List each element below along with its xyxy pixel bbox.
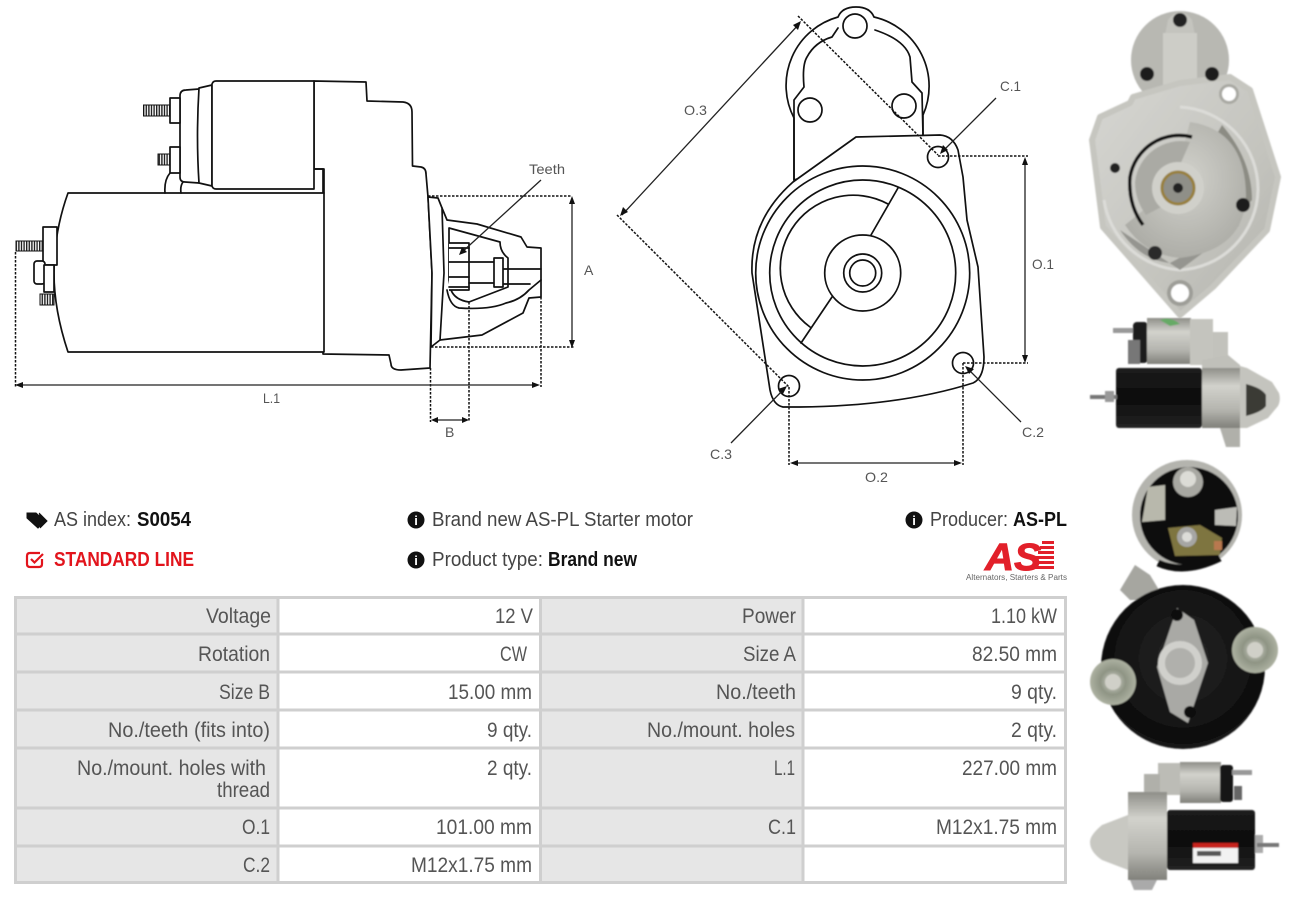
starter housing outline: [314, 81, 432, 370]
row: O.1 and C.1: M12x1.75 mm: [936, 816, 1057, 839]
row: size B and teeth: [219, 681, 1057, 704]
label: A: A: [584, 262, 594, 278]
concentric rings and hub: [756, 166, 970, 380]
row: mount holes with thread and L.1: thread: [217, 779, 270, 802]
row: O.1 and C.1: 101.00 mm: [436, 816, 532, 839]
label: B: B: [445, 424, 454, 440]
AS index text: AS index:: [54, 509, 131, 531]
row: O.1 and C.1: [242, 816, 1057, 839]
icon: tags: [27, 513, 47, 528]
row: mount holes with thread and L.1: 227.00 mm: [962, 757, 1057, 780]
icon: checked box: [27, 553, 43, 567]
producer label: Producer:: [930, 509, 1008, 531]
label: Teeth: Teeth: [529, 161, 565, 177]
front view technical drawing: [617, 7, 1054, 485]
side view technical drawing: [15, 81, 594, 440]
drive nose: [428, 197, 541, 347]
description line: [408, 509, 693, 531]
row: mount holes with thread and L.1: [77, 757, 1057, 802]
logo stripes: [1032, 541, 1054, 569]
top holes: [798, 14, 916, 122]
rear terminals: [16, 227, 57, 305]
bolt holes: [778, 146, 974, 396]
logo tagline: Alternators, Starters & Parts: [966, 573, 1067, 582]
icon: info: i: [912, 513, 916, 528]
producer line: [906, 509, 1067, 531]
icon: info: [408, 552, 424, 568]
motor body: [54, 193, 324, 352]
row: voltage and power: Voltage: [206, 605, 271, 628]
label: C.2: C.2: [1022, 424, 1044, 440]
row: O.1 and C.1: C.1: [768, 816, 796, 839]
photo: starter rear view: [1090, 460, 1278, 749]
photo: starter side view, bottom: [1090, 762, 1279, 890]
producer value: AS-PL: [1013, 509, 1067, 531]
photo: starter front view: [1092, 11, 1278, 315]
row: size B and teeth: Size B: [219, 681, 270, 704]
AS index value: S0054: [137, 509, 192, 531]
label: O.2: O.2: [865, 469, 888, 485]
icon: info: [906, 512, 922, 528]
specifications table: [15, 598, 1066, 882]
description text: Brand new AS-PL Starter motor: [432, 509, 693, 531]
row: rotation and size A: [198, 643, 1057, 666]
icon: info: [408, 512, 424, 528]
product type label: Product type:: [432, 549, 543, 571]
row: C.2: C.2: [243, 854, 270, 877]
product type value: Brand new: [548, 549, 637, 571]
solenoid: [144, 81, 324, 193]
row: teeth fits into and mount holes: 9 qty.: [487, 719, 532, 742]
row: mount holes with thread and L.1: 2 qty.: [487, 757, 532, 780]
row: voltage and power: 12 V: [495, 605, 533, 628]
row: mount holes with thread and L.1: No./mount. holes with: [77, 757, 266, 780]
label: C.1: C.1: [1000, 78, 1021, 94]
mounting bracket top: [786, 7, 929, 180]
label: C.3: C.3: [710, 446, 732, 462]
product type line: [408, 549, 637, 571]
row: C.2: M12x1.75 mm: [411, 854, 532, 877]
AS-PL logo: [966, 537, 1067, 582]
mounting flange: [752, 135, 984, 407]
row: rotation and size A: Rotation: [198, 643, 270, 666]
row: voltage and power: 1.10 kW: [991, 605, 1057, 628]
row: voltage and power: [206, 605, 1057, 628]
row: size B and teeth: No./teeth: [716, 681, 796, 704]
dimension lines: [15, 180, 575, 423]
row: rotation and size A: CW: [500, 643, 527, 666]
standard line text: STANDARD LINE: [54, 549, 194, 571]
row: rotation and size A: 82.50 mm: [972, 643, 1057, 666]
row: rotation and size A: Size A: [743, 643, 796, 666]
AS index line: [27, 509, 192, 531]
row: teeth fits into and mount holes: [108, 719, 1057, 742]
row: voltage and power: Power: [742, 605, 796, 628]
table grid: [15, 598, 1066, 882]
label: O.3: O.3: [684, 102, 707, 118]
row: size B and teeth: 9 qty.: [1011, 681, 1057, 704]
row: O.1 and C.1: O.1: [242, 816, 270, 839]
photo: starter side view, top: [1090, 318, 1280, 447]
row: size B and teeth: 15.00 mm: [448, 681, 532, 704]
dimension lines: [617, 16, 1028, 466]
icon: info: i: [414, 553, 418, 568]
row: teeth fits into and mount holes: 2 qty.: [1011, 719, 1057, 742]
standard line badge: [27, 549, 194, 571]
logo letters: AS: [984, 537, 1041, 579]
row: teeth fits into and mount holes: No./teeth (fits into): [108, 719, 270, 742]
row: teeth fits into and mount holes: No./mount. holes: [647, 719, 795, 742]
label: L.1: L.1: [263, 390, 280, 406]
label: O.1: O.1: [1032, 256, 1054, 272]
icon: info: i: [414, 513, 418, 528]
row: mount holes with thread and L.1: L.1: [774, 757, 795, 780]
row: C.2: [243, 854, 532, 877]
